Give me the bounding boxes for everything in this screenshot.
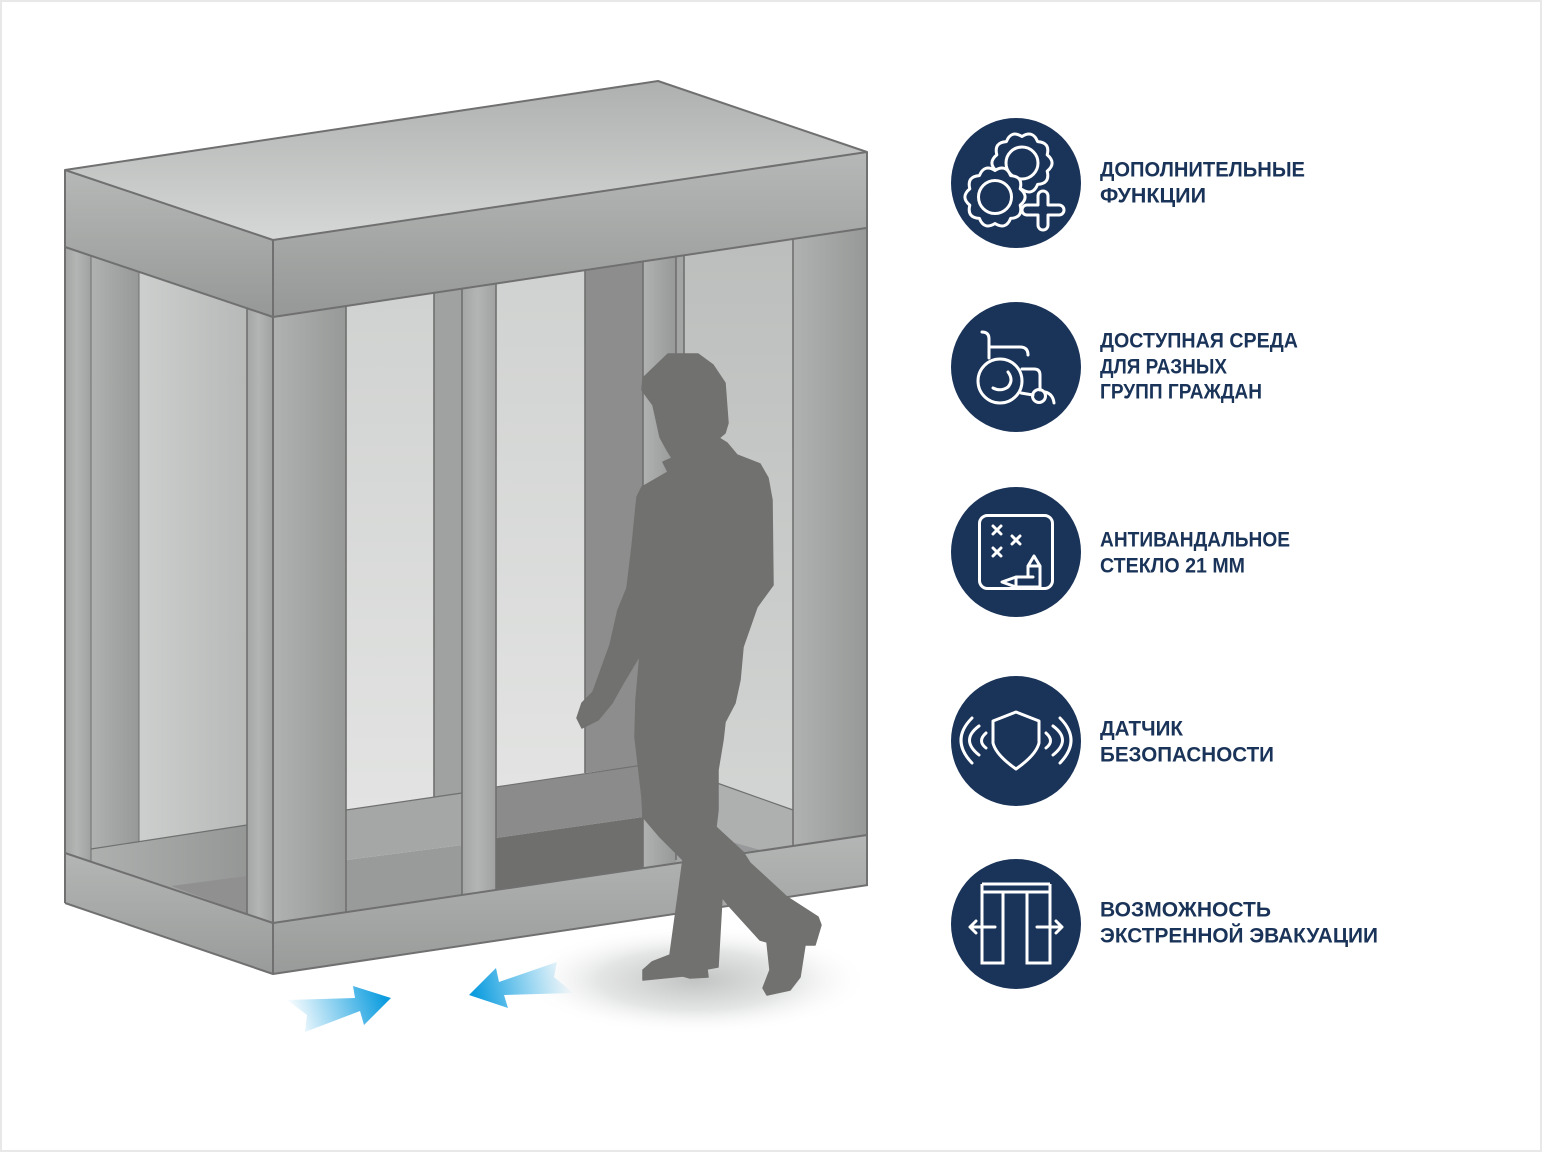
floor lower band left (346, 845, 462, 912)
label: ДАТЧИК (1100, 718, 1183, 740)
label (1100, 718, 1274, 766)
label: АНТИВАНДАЛЬНОЕ (1100, 528, 1290, 552)
feature 3: anti-vandal glass (951, 487, 1290, 617)
left side floor shadow (171, 876, 247, 914)
left near column (247, 308, 273, 923)
arrow: right-pointing blue (287, 986, 391, 1032)
icon: wheelchair (951, 302, 1081, 432)
floor band left (346, 793, 462, 860)
roof top face (65, 81, 867, 240)
light back column (643, 257, 676, 868)
right floor shadow (725, 840, 760, 854)
dark back column (585, 262, 643, 773)
left side back strip (91, 256, 139, 850)
cabin outlines (65, 81, 868, 974)
right floor (684, 772, 793, 862)
thin strip (676, 255, 684, 863)
base left face (65, 853, 273, 974)
feature 1: additional functions (951, 118, 1305, 248)
icon: shield with waves (951, 676, 1081, 806)
feature 4: safety sensor (951, 676, 1274, 806)
label (1100, 898, 1378, 948)
roof front face (273, 152, 867, 317)
label: СТЕКЛО 21 ММ (1100, 554, 1245, 578)
label: ДЛЯ РАЗНЫХ (1100, 356, 1227, 378)
front glass left (346, 293, 434, 810)
centre column (462, 284, 496, 895)
centre floor dark (496, 817, 643, 890)
feature 5: emergency evacuation (951, 859, 1378, 989)
floor shadow (520, 925, 870, 1035)
label: БЕЗОПАСНОСТИ (1100, 744, 1274, 766)
label: ВОЗМОЖНОСТЬ (1100, 898, 1271, 922)
label: ДОПОЛНИТЕЛЬНЫЕ (1100, 158, 1305, 182)
left side floor (91, 825, 247, 914)
feature 2: accessible environment (951, 302, 1298, 432)
icon: sliding doors with arrows (951, 859, 1081, 989)
label (1100, 158, 1305, 208)
label: ДОСТУПНАЯ СРЕДА (1100, 330, 1298, 352)
right glass (684, 239, 793, 810)
icon: gears and plus (951, 118, 1081, 248)
left side glass (139, 272, 247, 842)
front left column (273, 306, 346, 923)
illustration: turnstile cabin (65, 81, 868, 974)
person silhouette (577, 354, 821, 995)
centre floor band (496, 765, 643, 838)
icon: scratched glass with pencil (951, 487, 1081, 617)
left far column (65, 247, 91, 862)
front glass centre (496, 271, 585, 787)
label (1100, 528, 1290, 578)
label: ФУНКЦИИ (1100, 184, 1206, 208)
label: ГРУПП ГРАЖДАН (1100, 380, 1262, 404)
label (1100, 330, 1298, 404)
base front face (273, 835, 867, 974)
arrow: left-pointing blue (469, 962, 573, 1008)
back strip left (434, 289, 462, 797)
label: ЭКСТРЕННОЙ ЭВАКУАЦИИ (1100, 924, 1378, 948)
roof left face (65, 170, 273, 317)
right column (793, 228, 866, 846)
